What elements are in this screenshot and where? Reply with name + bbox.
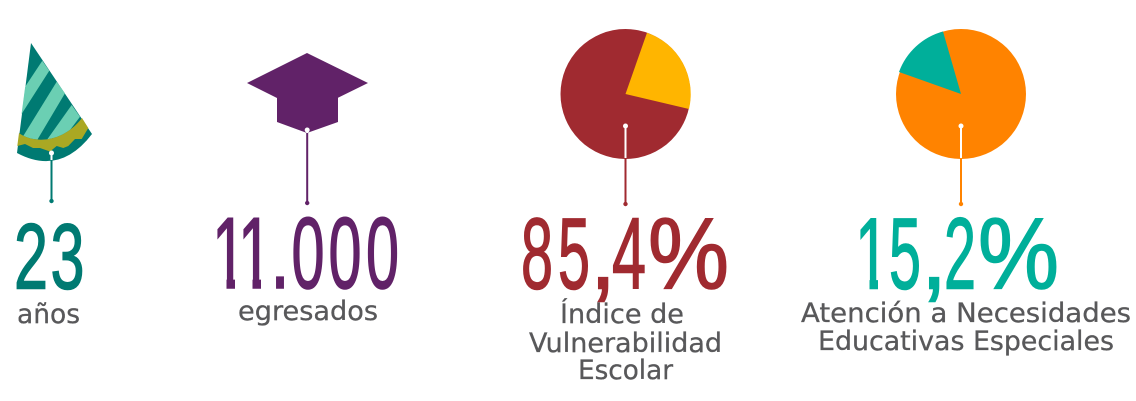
connector: age bbox=[49, 150, 54, 203]
number: 15,2%: , bbox=[921, 198, 947, 310]
number: 85,4%: 5 bbox=[558, 198, 590, 310]
number: 15,2%: 2 bbox=[944, 198, 976, 310]
connector: vulnerability bbox=[623, 124, 628, 206]
number: 23: 2 bbox=[14, 204, 48, 308]
label: años: años bbox=[17, 299, 80, 330]
connector: graduates bbox=[305, 128, 310, 205]
icon: party hat bbox=[17, 43, 92, 161]
number: 85,4%: 8 bbox=[521, 198, 553, 310]
label: Índice de Vulnerabilidad Escolar bbox=[529, 298, 722, 386]
number: 15,2%: % bbox=[978, 198, 1059, 310]
number: 11.000 bbox=[217, 216, 398, 290]
label: Índice de Vulnerabilidad Escolar: Vulnerabilidad bbox=[529, 328, 722, 359]
number: 11.000: 0 bbox=[366, 198, 399, 310]
number: 15,2% bbox=[860, 216, 1056, 302]
number: 15,2%: 1 bbox=[855, 198, 889, 310]
number: 11.000: 0 bbox=[328, 198, 362, 310]
connector: special needs bbox=[958, 124, 964, 206]
number: 85,4% bbox=[521, 198, 729, 310]
label: Atención a Necesidades Educativas Especiales: Atención a Necesidades bbox=[801, 298, 1131, 329]
panel: graduates bbox=[212, 53, 399, 327]
label: Índice de Vulnerabilidad Escolar: Escolar bbox=[578, 355, 674, 386]
panel: special needs bbox=[801, 29, 1131, 357]
number: 85,4%: , bbox=[590, 198, 616, 310]
number: 11.000: . bbox=[270, 198, 290, 310]
number: 85,4%: 4 bbox=[612, 198, 646, 310]
pie chart: vulnerability bbox=[560, 29, 691, 159]
label: Atención a Necesidades Educativas Especiales: Educativas Especiales bbox=[818, 326, 1114, 357]
icon: graduation cap bbox=[247, 53, 368, 133]
label: egresados: egresados bbox=[238, 296, 378, 327]
number: 11.000: 0 bbox=[292, 198, 324, 310]
number: 11.000: 1 bbox=[212, 198, 246, 310]
label: Índice de Vulnerabilidad Escolar: Índice de bbox=[560, 298, 684, 330]
number: 85,4%: % bbox=[648, 198, 729, 310]
pie chart: special needs bbox=[896, 29, 1026, 159]
panel: vulnerability bbox=[521, 29, 729, 386]
number: 11.000: 1 bbox=[238, 198, 272, 310]
panel: age bbox=[14, 43, 92, 330]
number: 15,2%: 5 bbox=[889, 198, 921, 310]
number: 23: 3 bbox=[50, 204, 84, 308]
label: Atención a Necesidades Educativas Especiales bbox=[801, 298, 1131, 357]
